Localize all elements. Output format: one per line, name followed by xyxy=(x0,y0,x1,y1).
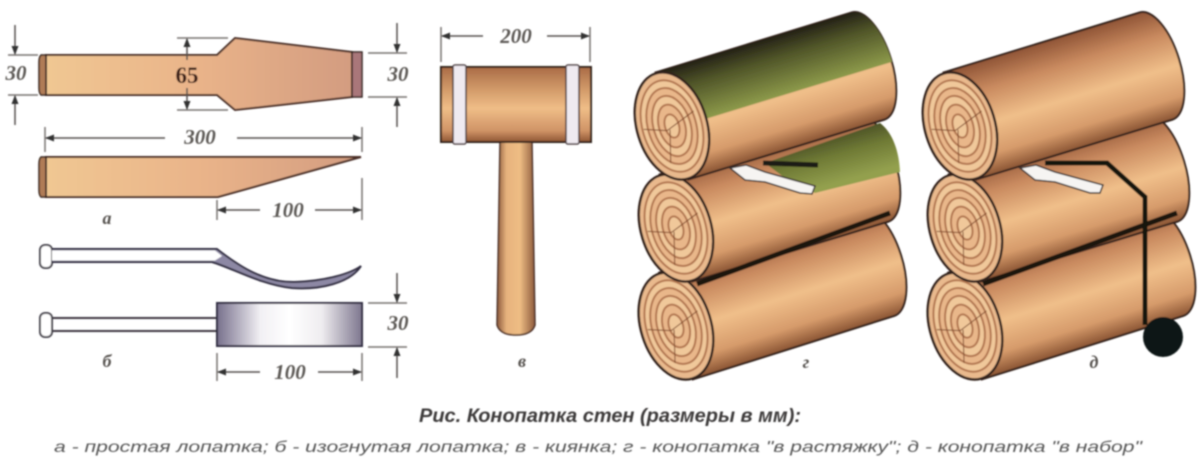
seam between lower logs xyxy=(697,213,890,284)
dimension: 100 on tool a: 100 xyxy=(272,198,304,222)
caption legend: а - простая лопатка; б - изогнутая лопатка; в - киянка; г - конопатка "в растяжку"; д - конопатка "в набор" xyxy=(54,439,1144,456)
log 1 xyxy=(910,5,1195,190)
caulk strand xyxy=(763,163,818,165)
caulk roll xyxy=(1143,317,1183,357)
dimension: 100 on tool b: 100 xyxy=(274,360,306,384)
label d: д xyxy=(1090,352,1099,372)
caulking spatula xyxy=(1020,165,1103,193)
seam between lower logs xyxy=(983,213,1177,284)
green patch on log 2 xyxy=(765,123,900,193)
dimension: 300: 300 xyxy=(183,125,216,149)
tool b: bent spatula, top view xyxy=(40,303,362,346)
dimension: 30 right: 30 xyxy=(386,62,409,86)
dimension: 65 xyxy=(176,38,228,110)
log wall g: caulking by stretching xyxy=(622,5,918,390)
dimension: 30 on tool b: 30 xyxy=(386,311,409,335)
log 2 xyxy=(915,107,1200,292)
log 2 xyxy=(626,107,911,292)
log 3 xyxy=(626,202,918,390)
dimension: 100 on tool b xyxy=(217,353,362,384)
log wall d: caulking by set xyxy=(910,5,1200,390)
dimension: 200 on mallet xyxy=(441,24,590,62)
label b: б xyxy=(103,351,113,371)
dimension: 200 on mallet: 200 xyxy=(499,24,532,48)
caulk strand xyxy=(1045,163,1145,325)
mallet xyxy=(441,65,591,335)
dimension: 30 right xyxy=(368,23,409,127)
label v: в xyxy=(518,351,526,371)
dimension: 300 xyxy=(45,125,362,152)
label g: г xyxy=(803,352,810,372)
dimension: 30 on tool b xyxy=(368,273,409,378)
log 3 xyxy=(915,202,1200,390)
dimension: 30 left xyxy=(4,25,38,125)
dimension: 65: 65 xyxy=(176,63,198,88)
caption heading: Рис. Конопатка стен (размеры в мм): xyxy=(419,406,801,427)
label a: а xyxy=(102,208,112,228)
log 1 xyxy=(622,5,907,190)
tool a: simple spatula, side view xyxy=(39,157,361,197)
caulking spatula xyxy=(730,165,815,194)
dimension: 100 on tool a xyxy=(217,178,362,222)
tool b: bent spatula, side view xyxy=(40,245,361,288)
tool a: simple spatula, top view xyxy=(39,38,362,110)
dimension: 30 left: 30 xyxy=(4,61,27,85)
